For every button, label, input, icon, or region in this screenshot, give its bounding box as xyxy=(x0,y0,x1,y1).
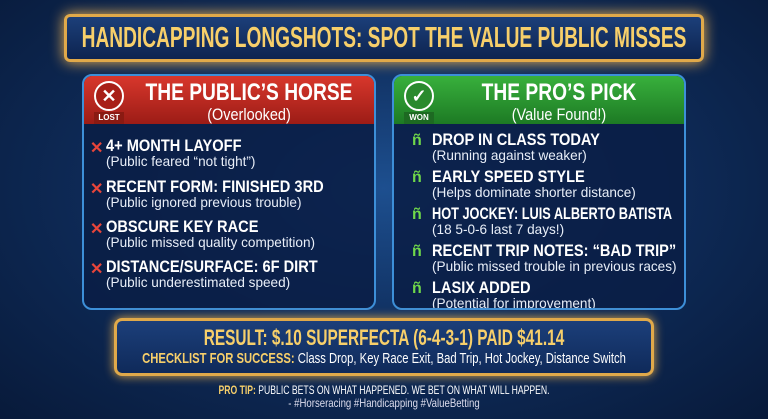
item 1: (Running against weaker) xyxy=(432,147,587,163)
header: pro's pick xyxy=(394,76,684,124)
panel: pro's pick: ñ xyxy=(412,206,422,223)
header: pro's pick: THE PRO’S PICK xyxy=(482,79,636,106)
item 5: LASIX ADDED xyxy=(432,278,531,297)
item 2 xyxy=(412,167,636,200)
pro tip: PRO TIP: PUBLIC BETS ON WHAT HAPPENED. WE BET ON WHAT WILL HAPPEN. xyxy=(218,383,550,397)
header: public's horse: THE PUBLIC’S HORSE xyxy=(146,79,352,106)
pro tip xyxy=(218,383,550,410)
item 4: DISTANCE/SURFACE: 6F DIRT xyxy=(106,257,318,276)
item 2: EARLY SPEED STYLE xyxy=(432,167,585,186)
panel: pro's pick: ñ xyxy=(412,169,422,186)
icon: won check xyxy=(404,81,434,111)
item 3: (Public missed quality competition) xyxy=(106,234,315,250)
panel: public's horse: ✕ xyxy=(90,181,103,198)
item 3: HOT JOCKEY: LUIS ALBERTO BATISTA xyxy=(432,204,672,223)
header: public's horse: LOST xyxy=(98,113,120,122)
panel: public's horse: ✕ xyxy=(90,261,103,278)
item 1 xyxy=(90,136,255,169)
item 4: (Public missed trouble in previous races) xyxy=(432,258,677,274)
icon: lost X xyxy=(94,81,124,111)
item 1: 4+ MONTH LAYOFF xyxy=(106,136,242,155)
header: public's horse: (Overlooked) xyxy=(207,105,291,124)
item 2: (Public ignored previous trouble) xyxy=(106,194,302,210)
panel: pro's pick xyxy=(392,74,686,310)
result headline: RESULT: $.10 SUPERFECTA (6-4-3-1) PAID $41.14 xyxy=(204,325,564,350)
panel: public's horse: ✕ xyxy=(90,140,103,157)
item 4 xyxy=(90,257,318,290)
item 1 xyxy=(412,130,600,163)
icon: lost X: ✕ xyxy=(101,86,117,106)
panel: pro's pick: ñ xyxy=(412,243,422,260)
item 1: (Public feared “not tight”) xyxy=(106,153,255,169)
icon: won check: ✓ xyxy=(411,86,427,106)
title banner xyxy=(64,14,704,62)
checklist: CHECKLIST FOR SUCCESS: Class Drop, Key Race Exit, Bad Trip, Hot Jockey, Distance Switch xyxy=(142,350,626,367)
pro tip: - #Horseracing #Handicapping #ValueBetting xyxy=(288,396,480,410)
item 4 xyxy=(412,241,677,274)
item 5 xyxy=(412,278,596,310)
panel: pro's pick: ñ xyxy=(412,132,422,149)
item 3: (18 5-0-6 last 7 days!) xyxy=(432,221,564,237)
panel: pro's pick: ñ xyxy=(412,280,422,297)
item 4: RECENT TRIP NOTES: “BAD TRIP” xyxy=(432,241,676,260)
item 2: (Helps dominate shorter distance) xyxy=(432,184,636,200)
header: pro's pick: (Value Found!) xyxy=(512,105,606,124)
item 1: DROP IN CLASS TODAY xyxy=(432,130,600,149)
item 4: (Public underestimated speed) xyxy=(106,274,290,290)
panel: public's horse xyxy=(82,74,376,310)
item 3: OBSCURE KEY RACE xyxy=(106,217,258,236)
result box xyxy=(114,318,654,376)
item 2 xyxy=(90,177,324,210)
title banner: HANDICAPPING LONGSHOTS: SPOT THE VALUE PUBLIC MISSES xyxy=(82,22,686,54)
panel: public's horse: ✕ xyxy=(90,221,103,238)
item 2: RECENT FORM: FINISHED 3RD xyxy=(106,177,324,196)
item 3 xyxy=(412,204,672,237)
item 3 xyxy=(90,217,315,250)
header: pro's pick: WON xyxy=(409,113,429,122)
header: public's horse xyxy=(84,76,374,124)
